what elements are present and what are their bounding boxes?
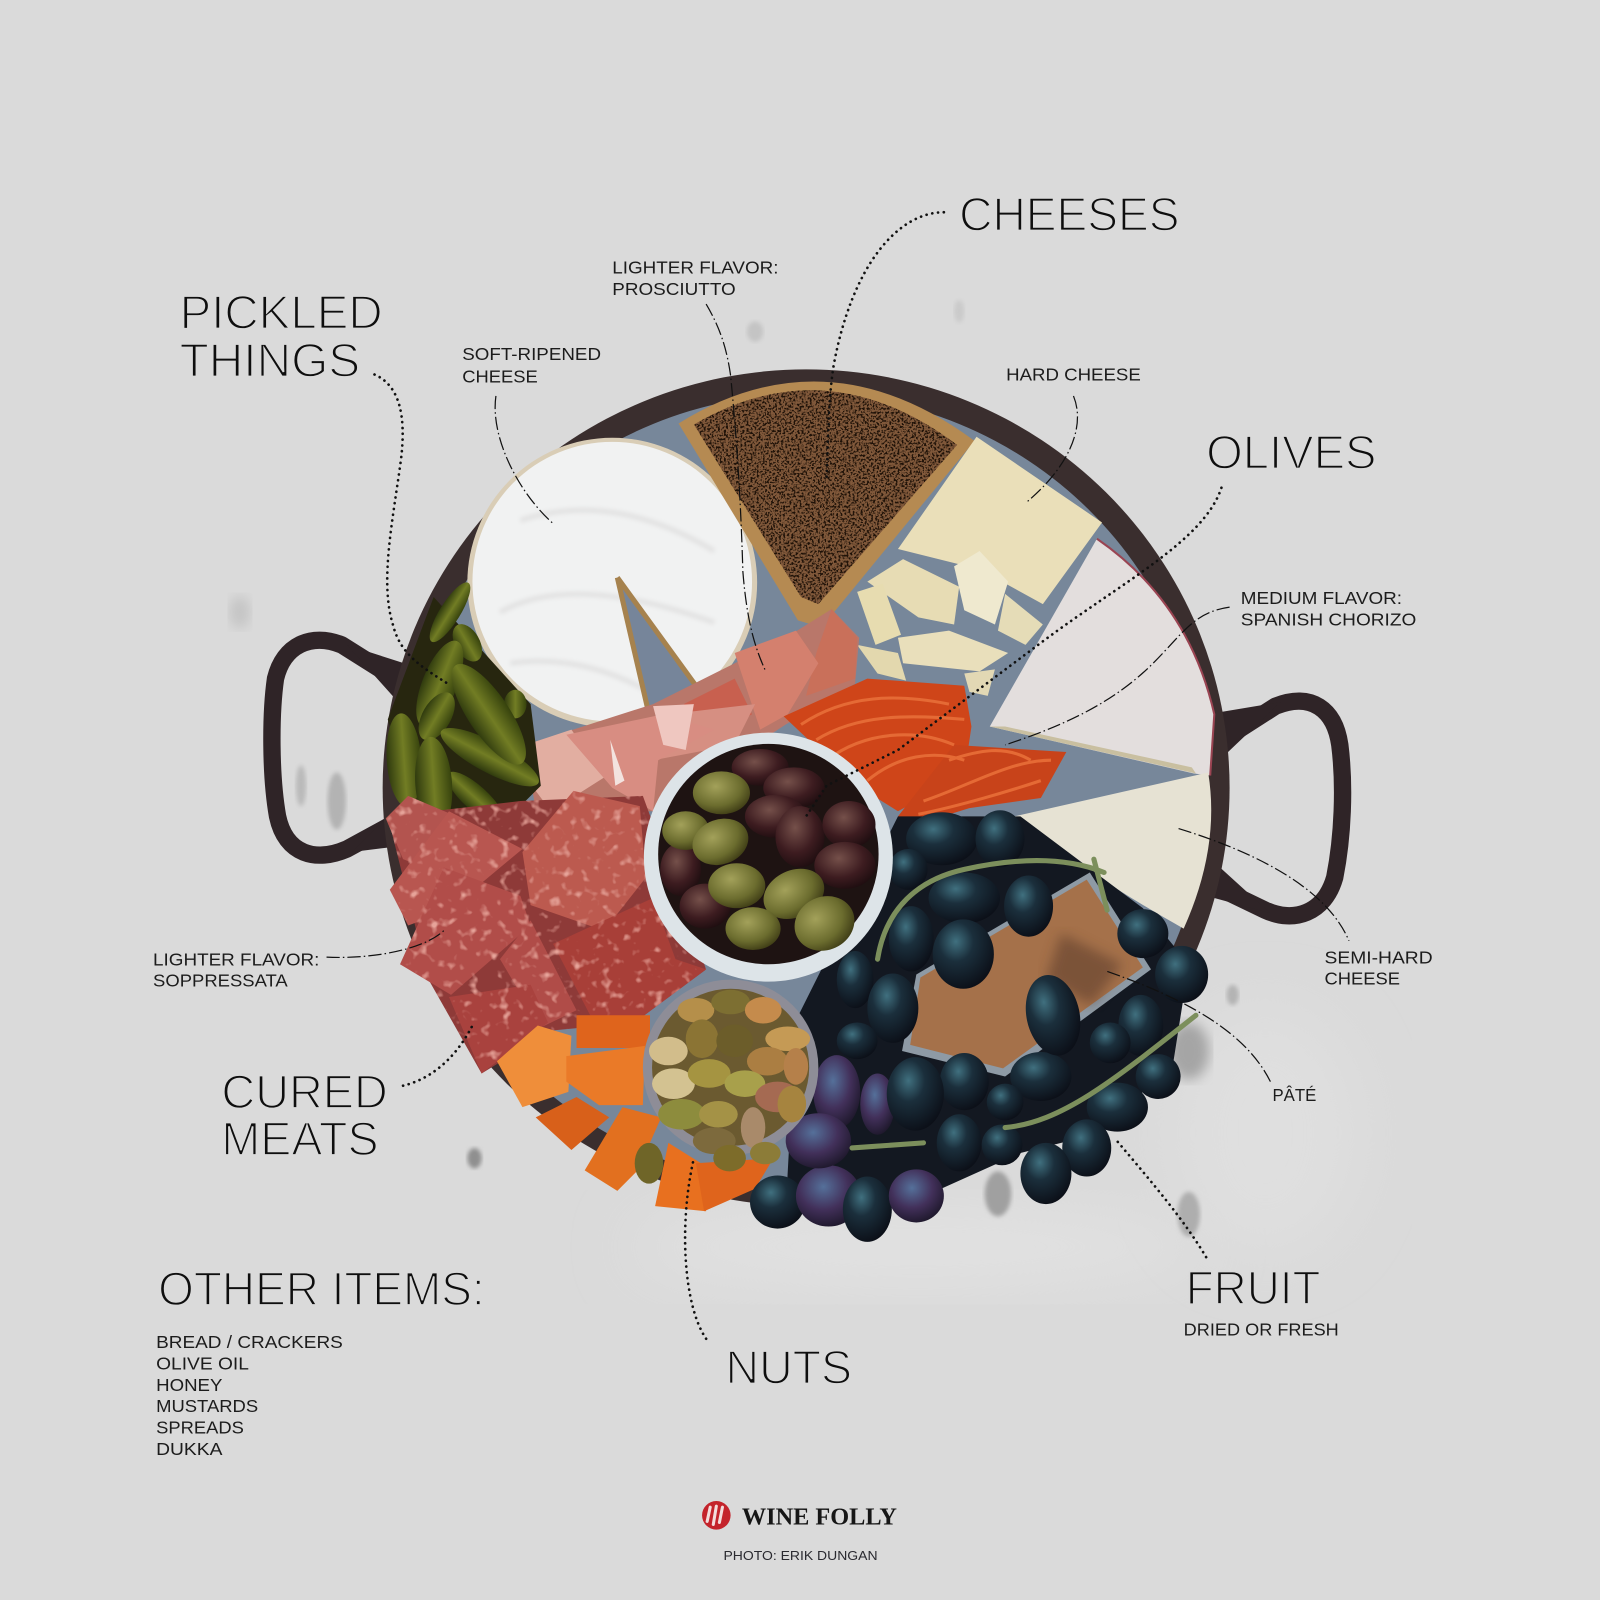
grapes and pâté (750, 810, 1208, 1242)
label: soft-ripened cheese: SOFT-RIPENED (462, 344, 601, 364)
heading: pickled things: PICKLED (180, 287, 383, 339)
dark shadow mass beneath grapes (786, 816, 1189, 1209)
cheese: large white wedge (990, 539, 1214, 776)
heading: fruit: FRUIT (1186, 1262, 1320, 1314)
text: dried or fresh: DRIED OR FRESH (1184, 1320, 1339, 1340)
label: semi-hard cheese (1324, 947, 1433, 989)
label: prosciutto: PROSCIUTTO (612, 279, 736, 299)
pickled gherkins (384, 577, 546, 832)
heading: nuts: NUTS (726, 1342, 852, 1394)
callout: olives line (806, 488, 1221, 816)
icon: right plate handle (1214, 701, 1343, 916)
brand: wine folly: WINE FOLLY (742, 1503, 897, 1530)
cut orange fruit pieces (497, 1015, 773, 1211)
label: soppressata: SOPPRESSATA (153, 971, 288, 991)
label: hard cheese: HARD CHEESE (1006, 365, 1141, 385)
cheese: soft-ripened brie wheel (467, 438, 757, 728)
olive bowl (644, 733, 893, 982)
heading: cheeses: CHEESES (959, 189, 1180, 241)
callout: pickled things line (374, 374, 451, 686)
list: other items: HONEY (156, 1375, 223, 1395)
label: spanish chorizo: MEDIUM FLAVOR: (1241, 588, 1402, 608)
label: soft-ripened cheese: CHEESE (462, 367, 538, 387)
callout: cheeses line (827, 212, 944, 480)
label: soft-ripened cheese (462, 344, 601, 387)
heading: cured meats (221, 1066, 388, 1165)
label: spanish chorizo: SPANISH CHORIZO (1241, 610, 1416, 630)
callout: soppressata line (327, 930, 445, 957)
list: other items (156, 1332, 343, 1459)
callout: fruit line (1114, 1138, 1206, 1257)
label: pâté: PÂTÉ (1272, 1084, 1316, 1105)
heading: pickled things: THINGS (180, 335, 360, 387)
callout: cured meats line (403, 1026, 472, 1086)
credit: photo: PHOTO: ERIK DUNGAN (723, 1548, 878, 1563)
callout: nuts line (685, 1158, 706, 1339)
icon: left plate handle (272, 640, 404, 855)
cheese: dukkah-crusted wedge (679, 382, 974, 628)
plate (383, 369, 1230, 1206)
grape stems (852, 859, 1196, 1148)
heading: cured meats: CURED (221, 1066, 388, 1118)
label: soppressata: LIGHTER FLAVOR: (153, 949, 319, 969)
callout: pâté line (1107, 971, 1270, 1082)
label: prosciutto: LIGHTER FLAVOR: (612, 257, 779, 277)
salami: soppressata slices (386, 791, 706, 1073)
icon: wine folly logo mark (702, 1501, 731, 1530)
label: spanish chorizo (1241, 588, 1416, 630)
callout: prosciutto line (706, 304, 765, 670)
label: semi-hard cheese: SEMI-HARD (1324, 947, 1433, 967)
cheese: hard cheese block and crumbles (857, 437, 1102, 696)
callout: spanish chorizo line (1005, 607, 1230, 745)
list: other items: BREAD / CRACKERS (156, 1332, 343, 1352)
callout: semi-hard cheese line (1179, 829, 1349, 941)
callout: soft-ripened cheese line (495, 396, 553, 523)
nut jar with pistachios (635, 980, 818, 1184)
background smudges (230, 300, 1357, 1283)
heading: pickled things (180, 287, 383, 387)
label: prosciutto (612, 257, 779, 299)
pâté in square tin (902, 872, 1151, 1077)
grape berries (750, 810, 1208, 1242)
chorizo (784, 679, 1066, 829)
heading: olives: OLIVES (1206, 426, 1377, 478)
callout: hard cheese line (1026, 396, 1077, 503)
list: other items: SPREADS (156, 1418, 244, 1438)
label: soppressata (153, 949, 319, 991)
heading: other items: OTHER ITEMS: (158, 1263, 485, 1315)
label: semi-hard cheese: CHEESE (1324, 969, 1400, 989)
list: other items: DUKKA (156, 1439, 223, 1459)
prosciutto (526, 609, 859, 811)
heading: cured meats: MEATS (221, 1113, 379, 1165)
cheese: semi-hard wedge (1014, 772, 1211, 929)
list: other items: OLIVE OIL (156, 1353, 249, 1373)
list: other items: MUSTARDS (156, 1396, 258, 1416)
